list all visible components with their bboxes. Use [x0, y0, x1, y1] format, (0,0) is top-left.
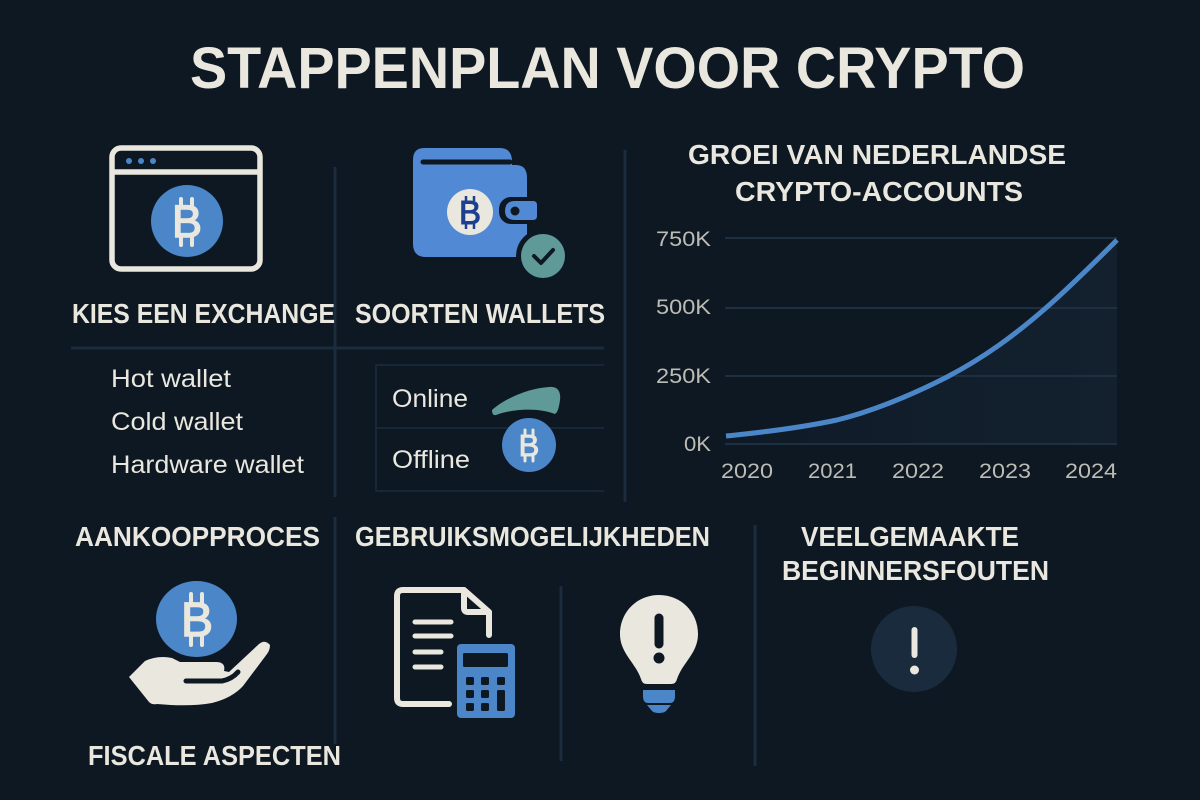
line chart: account growth: 2020: [721, 460, 773, 483]
icon: hand holding bitcoin: B: [181, 594, 213, 647]
table: online and offline: Online: [392, 385, 468, 413]
icon: browser window with bitcoin: B: [172, 196, 202, 247]
list: wallet types: [111, 365, 304, 479]
icon: document with calculator: [397, 590, 515, 718]
heading: kies een exchange: KIES EEN EXCHANGE: [72, 298, 335, 329]
heading: chart title: CRYPTO-ACCOUNTS: [735, 176, 1023, 207]
line chart: account growth: 2024: [1065, 460, 1117, 483]
icon: hand holding bitcoin: [129, 581, 270, 705]
line chart: account growth: 750K: [656, 228, 711, 251]
icon: light bulb with exclamation: [620, 595, 698, 713]
icon: bitcoin coin: B: [519, 428, 539, 463]
line chart: account growth: 2023: [979, 460, 1031, 483]
heading: veelgemaakte beginnersfouten: [782, 521, 1049, 586]
table: online and offline: [376, 365, 604, 491]
line chart: account growth: 2022: [892, 460, 944, 483]
icon: wallet with check: B: [459, 194, 481, 231]
heading: veelgemaakte beginnersfouten: BEGINNERSFOUTEN: [782, 555, 1049, 586]
list: wallet types: Cold wallet: [111, 408, 243, 436]
heading: veelgemaakte beginnersfouten: VEELGEMAAKTE: [801, 521, 1019, 552]
table: online and offline: Offline: [392, 446, 470, 474]
line chart: account growth: 250K: [656, 365, 711, 388]
heading: gebruiksmogelijkheden: GEBRUIKSMOGELIJKHEDEN: [355, 521, 710, 552]
heading: soorten wallets: SOORTEN WALLETS: [355, 298, 605, 329]
heading: chart title: GROEI VAN NEDERLANDSE: [688, 139, 1066, 170]
icon: bitcoin coin: [502, 418, 556, 472]
list: wallet types: Hardware wallet: [111, 451, 304, 479]
line chart: account growth: 500K: [656, 296, 711, 319]
icon: teal swoosh: [492, 387, 560, 415]
icon: warning circle: [871, 606, 957, 692]
list: wallet types: Hot wallet: [111, 365, 231, 393]
heading: aankoopproces: AANKOOPPROCES: [75, 521, 320, 552]
icon: browser window with bitcoin: [112, 148, 260, 269]
heading: fiscale aspecten: FISCALE ASPECTEN: [88, 740, 341, 771]
line chart: account growth: [656, 228, 1117, 483]
line chart: account growth: 2021: [808, 460, 857, 483]
icon: wallet with check: [413, 148, 570, 283]
line chart: account growth: 0K: [684, 433, 711, 456]
title: STAPPENPLAN VOOR CRYPTO: [190, 36, 1025, 101]
heading: chart title: [688, 139, 1066, 207]
